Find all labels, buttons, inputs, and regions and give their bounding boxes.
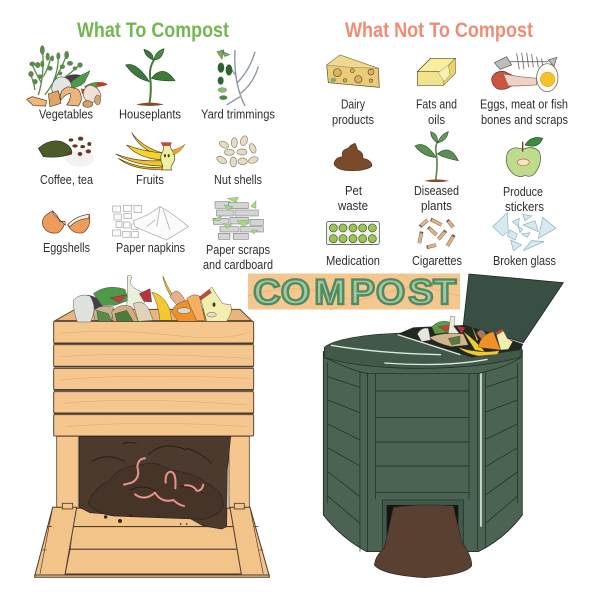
icon: eggshells <box>42 211 90 233</box>
banner: compost: COMPOST <box>253 272 456 312</box>
text: broken glass: Broken glass <box>493 253 556 268</box>
icon: broken glass <box>493 213 556 251</box>
text: dairy products: Dairy <box>341 96 365 112</box>
text: paper scraps and cardboard: Paper scraps <box>206 242 270 257</box>
text: nut shells: Nut shells <box>214 172 262 187</box>
text: fats and oils: Fats and <box>416 96 457 112</box>
title: what not to compost: What Not To Compost <box>345 19 533 42</box>
icon: diseased plants <box>415 132 458 182</box>
text: diseased plants: Diseased <box>414 183 459 198</box>
wooden planks <box>54 321 254 436</box>
open door of wooden bin <box>35 507 269 577</box>
icon: pet waste <box>334 143 372 171</box>
bin body <box>323 332 522 552</box>
food scraps in plastic bin <box>417 316 513 356</box>
text: diseased plants: plants <box>421 198 452 213</box>
text: pet waste <box>337 183 368 213</box>
text: cigarettes: Cigarettes <box>412 253 462 268</box>
icon: fruits <box>116 133 185 170</box>
text: produce stickers: Produce <box>503 184 543 199</box>
icon: fats and oils <box>417 58 455 85</box>
icon: eggs, meat or fish bones <box>492 53 558 92</box>
icon: paper napkins <box>113 205 188 240</box>
text: paper scraps and cardboard <box>203 242 273 272</box>
text: pet waste: waste <box>337 198 368 213</box>
back rim of wooden bin <box>55 309 252 321</box>
bin lid highlights <box>331 335 488 365</box>
text: eggshells: Eggshells <box>43 240 90 255</box>
title: what to compost: What To Compost <box>77 19 229 42</box>
panel: items not to compost <box>326 53 568 268</box>
text: fats and oils: oils <box>428 112 445 127</box>
compost soil with worms <box>79 436 231 529</box>
illustration: plastic compost bin <box>323 274 563 578</box>
icon: houseplants <box>126 49 175 106</box>
food scraps on wooden bin <box>73 276 231 322</box>
bin door opening <box>382 500 463 552</box>
wooden posts <box>57 436 249 508</box>
text: produce stickers <box>503 184 544 214</box>
icon: nut shells <box>216 135 259 167</box>
text: vegetables: Vegetables <box>39 106 93 122</box>
text: medication: Medication <box>326 253 380 268</box>
text: fruits: Fruits <box>136 172 164 187</box>
text: coffee, tea: Coffee, tea <box>40 172 94 187</box>
text: houseplants: Houseplants <box>119 106 181 122</box>
icon: produce stickers <box>506 137 543 177</box>
icon: yard trimmings <box>217 50 258 106</box>
text: paper napkins: Paper napkins <box>116 240 185 255</box>
text: produce stickers: stickers <box>505 199 544 214</box>
bin top <box>324 328 522 368</box>
illustration: wooden compost bin <box>35 309 269 577</box>
door hinges <box>62 503 244 509</box>
text: dairy products: products <box>332 112 374 127</box>
text: diseased plants <box>414 183 459 213</box>
icon: vegetables <box>27 45 108 107</box>
icon: medication <box>326 222 379 245</box>
icon: paper scraps and cardboard <box>212 197 263 239</box>
text: eggs, meat or fish bones and scraps <box>480 96 568 127</box>
text: yard trimmings: Yard trimmings <box>201 106 275 122</box>
text: pet waste: Pet <box>345 183 362 198</box>
panel: compost items <box>27 45 275 272</box>
bin plank lines <box>328 363 518 552</box>
text: eggs, meat or fish bones and scraps: Eggs, meat or fish <box>480 96 568 112</box>
text: dairy products <box>332 96 374 127</box>
bin opening <box>398 325 523 357</box>
text: paper scraps and cardboard: and cardboard <box>203 257 273 272</box>
open lid <box>463 274 563 343</box>
compost spilling from bin <box>374 505 472 578</box>
icon: coffee, tea <box>38 137 94 167</box>
icon: cigarettes <box>419 219 454 247</box>
text: fats and oils <box>416 96 457 127</box>
icon: dairy products <box>327 55 379 87</box>
text: eggs, meat or fish bones and scraps: bones and scraps <box>481 112 568 127</box>
